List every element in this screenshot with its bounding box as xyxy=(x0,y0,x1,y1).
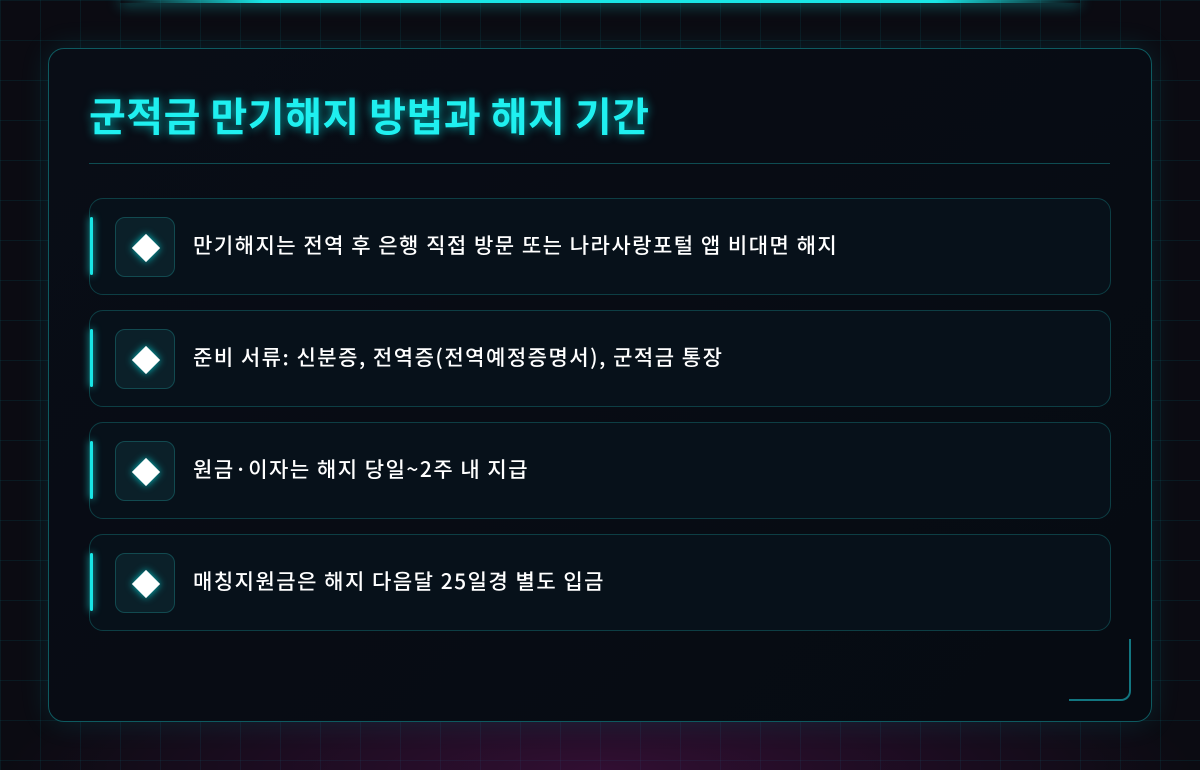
icon: diamond xyxy=(115,217,175,277)
text 1: 만기해지는 전역 후 은행 직접 방문 또는 나라사랑포털 앱 비대면 해지 xyxy=(193,230,838,260)
item 4 xyxy=(89,534,1111,631)
title: 군적금 만기해지 방법과 해지 기간 xyxy=(89,85,650,143)
text 4: 매칭지원금은 해지 다음달 25일경 별도 입금 xyxy=(193,566,605,596)
item 3 xyxy=(89,422,1111,519)
icon: diamond xyxy=(115,441,175,501)
corner accent xyxy=(1069,639,1131,701)
text 2: 준비 서류: 신분증, 전역증(전역예정증명서), 군적금 통장 xyxy=(193,342,723,372)
item 1 xyxy=(89,198,1111,295)
icon: diamond xyxy=(115,553,175,613)
icon: diamond xyxy=(115,329,175,389)
item 2 xyxy=(89,310,1111,407)
text 3: 원금·이자는 해지 당일~2주 내 지급 xyxy=(193,454,529,484)
